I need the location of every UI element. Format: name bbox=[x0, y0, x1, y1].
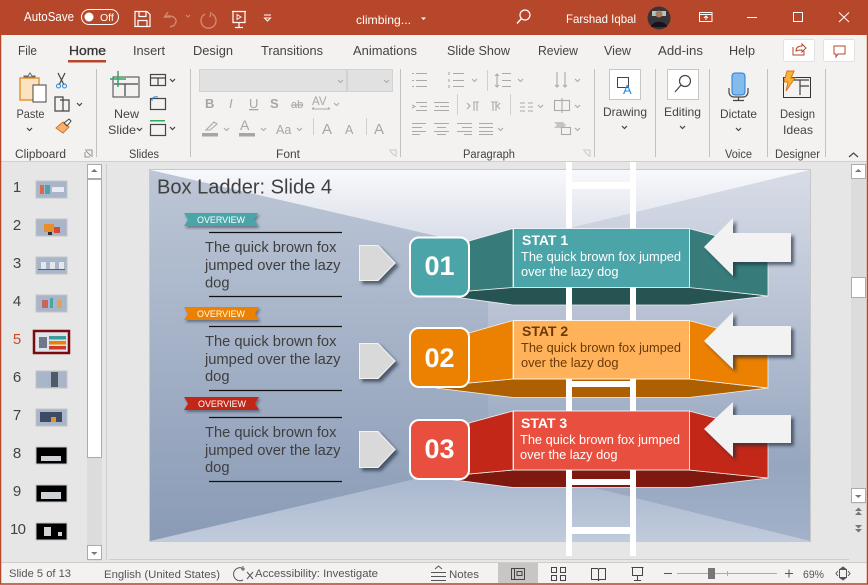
ribbon group: slides: Slides bbox=[129, 149, 159, 161]
ribbon group: editing: Editing bbox=[664, 105, 701, 119]
ribbon group: font: Aa bbox=[276, 123, 291, 137]
ribbon group: slides: New bbox=[114, 107, 139, 121]
title bar: climbing... bbox=[356, 13, 411, 27]
number box 03: 03 bbox=[424, 434, 455, 464]
slide thumbnails panel: 5 bbox=[13, 331, 21, 348]
band 3: stat 3: The quick brown fox jumped bbox=[520, 432, 680, 447]
band 2: stat 2: The quick brown fox jumped bbox=[521, 340, 681, 355]
band 2: stat 2: over the lazy dog bbox=[521, 355, 618, 370]
slide thumbnails panel: 6 bbox=[13, 369, 21, 386]
slide thumbnails panel: 7 bbox=[13, 407, 21, 424]
ribbon group: clipboard: Clipboard bbox=[15, 149, 66, 161]
ribbon group: font: B bbox=[205, 96, 214, 111]
number box 01: 01 bbox=[424, 251, 455, 281]
slide thumbnails panel: 1 bbox=[13, 179, 21, 196]
overview ribbon: orange bbox=[184, 307, 259, 320]
title bar: Farshad Iqbal bbox=[566, 12, 636, 26]
overview ribbon: teal bbox=[184, 213, 258, 226]
ribbon group: font: A bbox=[240, 117, 250, 133]
overview ribbon: red: OVERVIEW bbox=[198, 399, 246, 409]
number box 03 bbox=[410, 420, 469, 479]
ribbon group: slides: Slide bbox=[108, 123, 136, 137]
ribbon group: slides bbox=[108, 71, 175, 161]
status bar: Notes bbox=[449, 569, 480, 581]
overview ribbon: teal: OVERVIEW bbox=[197, 215, 245, 225]
overview row 1: dog bbox=[205, 276, 230, 292]
overview row 2: The quick brown fox bbox=[205, 334, 337, 350]
ribbon group: paragraph: Paragraph bbox=[463, 149, 515, 161]
overview row 3: dog bbox=[205, 460, 230, 476]
status bar: 69% bbox=[803, 569, 824, 581]
ribbon tabs: Add-ins bbox=[658, 44, 703, 58]
band 1: stat 1: The quick brown fox jumped bbox=[521, 249, 681, 264]
ribbon tabs: Slide Show bbox=[447, 44, 511, 58]
thumbnail scrollbar bbox=[87, 164, 102, 561]
overview ribbon: orange: OVERVIEW bbox=[197, 309, 245, 319]
status bar: English (United States) bbox=[104, 569, 220, 581]
overview row 3: jumped over the lazy bbox=[204, 443, 341, 459]
band 3: stat 3 bbox=[410, 402, 791, 479]
ribbon group: designer: Ideas bbox=[783, 123, 813, 137]
ribbon group: font: AV bbox=[312, 96, 327, 108]
band 2: stat 2: STAT 2 bbox=[522, 323, 568, 339]
ribbon group: drawing bbox=[603, 70, 647, 128]
ribbon tabs: Home bbox=[69, 44, 106, 58]
status bar: Slide 5 of 13 bbox=[9, 568, 71, 580]
slide thumbnails panel: 2 bbox=[13, 217, 21, 234]
ribbon group: designer: Designer bbox=[775, 149, 820, 161]
slide thumbnails panel: 9 bbox=[13, 483, 21, 500]
overview row 1: jumped over the lazy bbox=[204, 258, 341, 274]
ribbon tabs: Transitions bbox=[261, 44, 323, 58]
overview row 2: dog bbox=[205, 369, 230, 385]
status bar: Accessibility: Investigate bbox=[255, 568, 378, 580]
band 3: stat 3: over the lazy dog bbox=[520, 447, 617, 462]
ribbon group: paragraph bbox=[412, 70, 590, 161]
overview row 1: The quick brown fox bbox=[205, 240, 337, 256]
band 2: stat 2 bbox=[410, 312, 791, 388]
slide thumbnails panel: 4 bbox=[13, 293, 21, 310]
title bar bbox=[0, 0, 868, 35]
overview ribbon: red bbox=[184, 397, 259, 410]
number box 02: 02 bbox=[424, 343, 455, 373]
ribbon group: drawing: A bbox=[623, 82, 632, 97]
slide thumbnails panel: 10 bbox=[10, 521, 26, 538]
band bottom faces bbox=[436, 287, 768, 488]
ribbon group: font: I bbox=[229, 96, 233, 111]
ribbon tabs: File bbox=[18, 44, 37, 58]
ribbon group: font: Font bbox=[276, 149, 301, 161]
ribbon group: clipboard: Paste bbox=[16, 107, 45, 121]
overview row 2: jumped over the lazy bbox=[204, 352, 341, 368]
ribbon tabs: Animations bbox=[353, 44, 417, 58]
ribbon tabs: View bbox=[604, 44, 632, 58]
number box 01 bbox=[410, 238, 469, 296]
right scrollbar bbox=[851, 164, 866, 532]
overview row 3: The quick brown fox bbox=[205, 425, 337, 441]
slide background bbox=[149, 169, 811, 542]
ribbon group: clipboard bbox=[15, 73, 92, 161]
ribbon group: font bbox=[200, 70, 396, 161]
ribbon group: font: A bbox=[374, 121, 384, 138]
band 1: stat 1: STAT 1 bbox=[522, 232, 568, 248]
ribbon tabs: Insert bbox=[133, 44, 166, 58]
ribbon group: drawing: Drawing bbox=[603, 105, 647, 119]
ribbon group: font: A bbox=[322, 121, 332, 138]
ribbon group: font: S bbox=[270, 96, 279, 111]
title bar: AutoSave bbox=[24, 10, 74, 24]
ribbon group: voice bbox=[720, 73, 757, 161]
ribbon group: voice: Voice bbox=[725, 149, 752, 161]
band 3: stat 3: STAT 3 bbox=[521, 415, 567, 431]
ribbon tabs: Review bbox=[538, 44, 579, 58]
number box 02 bbox=[410, 328, 469, 387]
overview row 3 bbox=[184, 397, 395, 482]
ribbon group: font: ab bbox=[291, 99, 303, 111]
title bar: Off bbox=[100, 12, 114, 24]
band 1: stat 1: over the lazy dog bbox=[521, 264, 618, 279]
ribbon group: voice: Dictate bbox=[720, 107, 757, 121]
ribbon tabs: Help bbox=[729, 44, 755, 58]
overview row 1 bbox=[184, 213, 395, 296]
ribbon group: font: U bbox=[249, 96, 258, 111]
ribbon tabs: Design bbox=[193, 44, 233, 58]
status bar bbox=[0, 562, 868, 583]
slide thumbnails panel: 8 bbox=[13, 445, 21, 462]
band 1: stat 1 bbox=[410, 218, 791, 296]
ribbon group: designer: Design bbox=[780, 107, 815, 121]
ladder bbox=[566, 162, 636, 556]
ribbon group: editing bbox=[664, 70, 701, 128]
ribbon group: font: A bbox=[345, 123, 354, 137]
ribbon tabs bbox=[0, 35, 868, 162]
slide title: Box Ladder: Slide 4 bbox=[157, 176, 332, 198]
slide thumbnails panel bbox=[10, 164, 849, 560]
overview row 2 bbox=[184, 307, 395, 390]
ribbon group: designer bbox=[775, 71, 858, 161]
slide thumbnails panel: 3 bbox=[13, 255, 21, 272]
